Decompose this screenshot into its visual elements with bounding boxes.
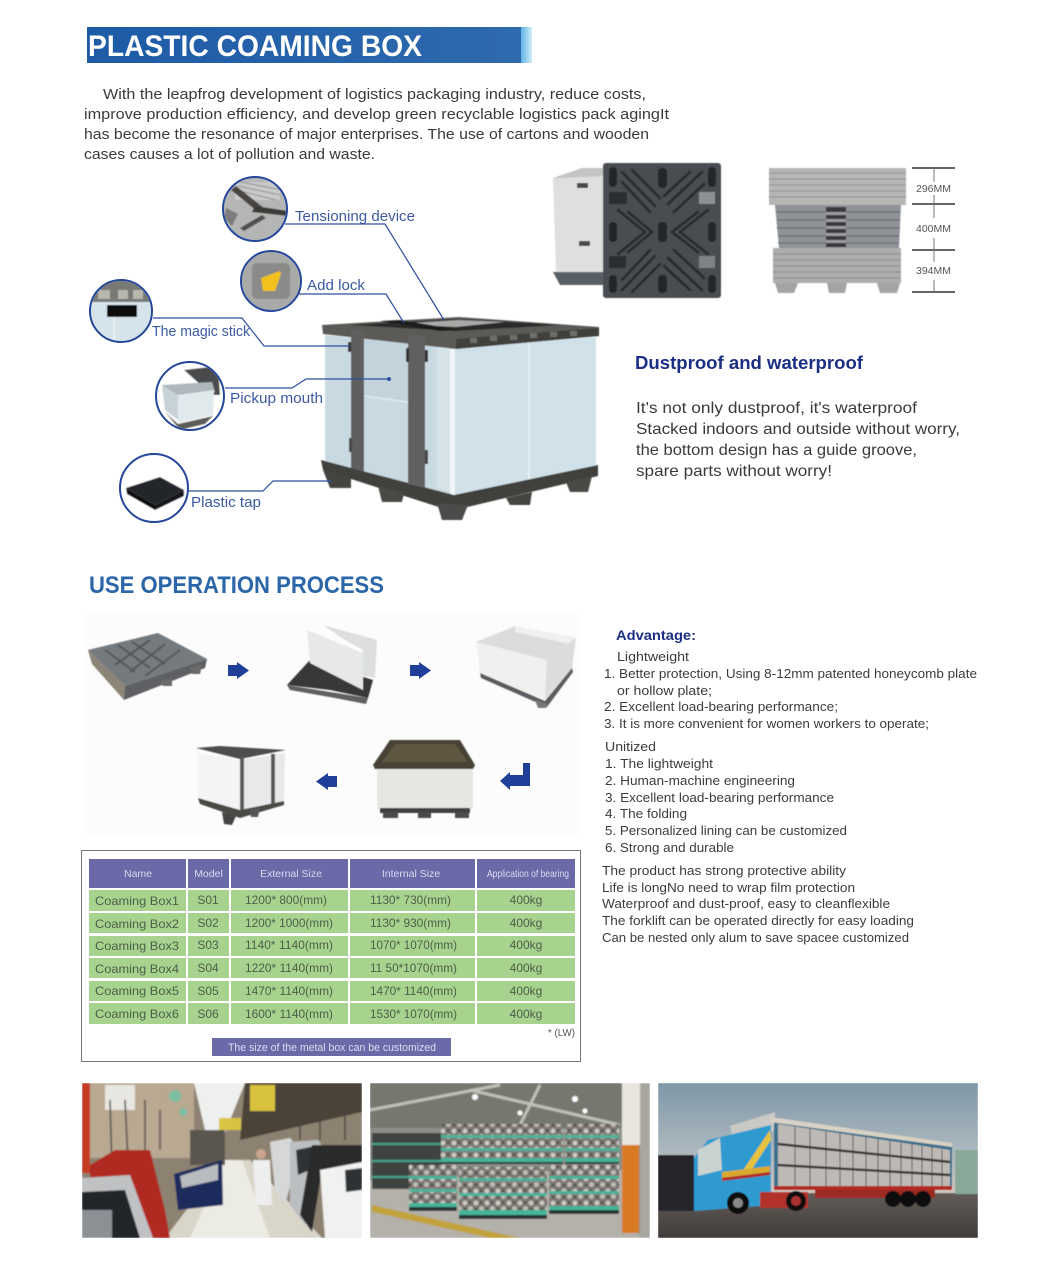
row: coaming box 5: 1470* 1140(mm) — [370, 984, 457, 998]
row: coaming box 3: 400kg — [510, 938, 542, 952]
advantages text: 1. Better protection, Using 8-12mm patented honeycomb plate — [604, 666, 977, 681]
photo: folded stack with dimensions — [769, 168, 955, 293]
text block: dustproof description: the bottom design has a guide groove, — [636, 442, 917, 459]
intro paragraph: has become the resonance of major enterprises. The use of cartons and wooden — [84, 126, 649, 143]
intro paragraph — [84, 86, 670, 163]
specification table — [82, 850, 580, 1062]
icon: tensioning device detail — [222, 176, 288, 242]
dimension: 400MM: 400MM — [916, 223, 951, 235]
title: PLASTIC COAMING BOX — [88, 30, 422, 63]
text block: dustproof description: Stacked indoors and outside without worry, — [636, 421, 960, 438]
label: add lock: Add lock — [307, 277, 365, 294]
advantages text: The product has strong protective ability — [602, 863, 847, 878]
row: coaming box 2: S02 — [197, 916, 219, 930]
advantages text: 3. It is more convenient for women workers to operate; — [604, 716, 929, 731]
process diagram panel — [85, 613, 580, 835]
arrow left — [316, 773, 337, 790]
row: coaming box 2 — [89, 913, 575, 933]
dimension: 394MM: 394MM — [916, 265, 951, 277]
row: coaming box 4: Coaming Box4 — [95, 962, 179, 976]
advantages text: Waterproof and dust-proof, easy to cleanflexible — [602, 896, 890, 911]
arrow left-turn — [500, 763, 530, 790]
text block: dustproof description: spare parts without worry! — [636, 463, 832, 480]
icon: magic stick detail — [90, 280, 152, 342]
customization note bar: The size of the metal box can be customized — [228, 1042, 436, 1054]
row: coaming box 3: 1140* 1140(mm) — [245, 938, 333, 952]
callout line: add lock — [299, 294, 404, 323]
icon: add lock detail — [241, 251, 301, 311]
advantages text — [602, 627, 977, 945]
advantages text: 3. Excellent load-bearing performance — [605, 790, 834, 805]
row: coaming box 5: 400kg — [510, 984, 542, 998]
photo: warehouse with stacked pallets — [370, 1083, 650, 1238]
text block: dustproof description: It's not only dustproof, it's waterproof — [636, 400, 918, 417]
row: coaming box 6: 400kg — [510, 1007, 542, 1021]
row: coaming box 1: 1200* 800(mm) — [245, 893, 327, 907]
advantages text: 5. Personalized lining can be customized — [605, 823, 847, 838]
table header: Name — [124, 868, 152, 880]
dimension: 296MM: 296MM — [916, 183, 951, 195]
icon: plastic tap pallet detail — [120, 454, 188, 522]
advantages text: The forklift can be operated directly for easy loading — [602, 913, 914, 928]
row: coaming box 5: Coaming Box5 — [95, 984, 179, 998]
step 1: pallet — [88, 633, 207, 700]
row: coaming box 4: 400kg — [510, 961, 542, 975]
table header — [89, 859, 575, 888]
photo: blue truck with trailer — [658, 1083, 978, 1238]
callout line: tensioning device — [285, 224, 444, 320]
row: coaming box 6: 1530* 1070(mm) — [370, 1007, 457, 1021]
advantages text: 2. Excellent load-bearing performance; — [604, 699, 838, 714]
advantages text: 6. Strong and durable — [605, 840, 734, 855]
row: coaming box 2: Coaming Box2 — [95, 917, 179, 931]
row: coaming box 1 — [89, 890, 575, 911]
text block: dustproof description — [636, 400, 960, 480]
label: pickup mouth: Pickup mouth — [230, 390, 323, 407]
step 2: base with panels — [287, 625, 377, 704]
table header: Model — [194, 868, 223, 880]
label: the magic stick: The magic stick — [152, 323, 250, 340]
advantages text: Unitized — [605, 739, 656, 754]
row: coaming box 2: 400kg — [510, 916, 542, 930]
row: coaming box 4: S04 — [197, 961, 219, 975]
row: coaming box 1: 1130* 730(mm) — [370, 893, 451, 907]
row: coaming box 1: 400kg — [510, 893, 542, 907]
advantages text: 4. The folding — [605, 806, 687, 821]
unit note: * (LW) — [548, 1028, 575, 1039]
heading: advantage: Advantage: — [616, 627, 696, 643]
photo: box with pallet underside — [553, 163, 721, 298]
callout line: pickup mouth — [225, 377, 391, 388]
arrow right 2 — [410, 662, 431, 679]
row: coaming box 5 — [89, 981, 575, 1001]
icon: pickup mouth detail — [156, 362, 224, 430]
row: coaming box 3: 1070* 1070(mm) — [370, 938, 457, 952]
row: coaming box 3: Coaming Box3 — [95, 939, 179, 953]
row: coaming box 2: 1200* 1000(mm) — [245, 916, 333, 930]
row: coaming box 2: 1130* 930(mm) — [370, 916, 451, 930]
photo: car assembly line — [82, 1083, 362, 1238]
row: coaming box 3: S03 — [197, 938, 219, 952]
row: coaming box 5: S05 — [197, 984, 219, 998]
row: coaming box 6: S06 — [197, 1007, 219, 1021]
advantages text: 1. The lightweight — [605, 756, 713, 771]
callout line: plastic tap — [189, 481, 332, 491]
row: coaming box 6: Coaming Box6 — [95, 1007, 179, 1021]
row: coaming box 6 — [89, 1003, 575, 1024]
arrow right 1 — [228, 662, 249, 679]
row: coaming box 4: 1220* 1140(mm) — [245, 961, 333, 975]
row: coaming box 4 — [89, 958, 575, 978]
row: coaming box 3 — [89, 936, 575, 956]
row: coaming box 1: Coaming Box1 — [95, 894, 179, 908]
intro paragraph: cases causes a lot of pollution and waste. — [84, 146, 375, 163]
label: tensioning device: Tensioning device — [295, 208, 415, 225]
heading: dustproof and waterproof: Dustproof and waterproof — [635, 353, 864, 373]
heading: use operation process: USE OPERATION PROCESS — [89, 572, 384, 599]
step 3: open box — [476, 626, 576, 708]
advantages text: Can be nested only alum to save spacee customized — [602, 930, 909, 945]
step 5: strapped box — [196, 746, 286, 825]
advantages text: or hollow plate; — [617, 683, 712, 698]
advantages text: Life is longNo need to wrap film protection — [602, 880, 855, 895]
intro paragraph: With the leapfrog development of logistics packaging industry, reduce costs, — [103, 86, 646, 103]
step 4: closed box with lid — [373, 740, 475, 818]
customization note bar — [212, 1038, 451, 1056]
advantages text: 2. Human-machine engineering — [605, 773, 795, 788]
row: coaming box 5: 1470* 1140(mm) — [245, 984, 333, 998]
table header: Internal Size — [382, 868, 440, 880]
row: coaming box 1: S01 — [197, 893, 219, 907]
product diagram: main coaming box with callouts — [90, 176, 599, 522]
row: coaming box 6: 1600* 1140(mm) — [245, 1007, 333, 1021]
advantages text: Lightweight — [617, 649, 689, 664]
table header: External Size — [260, 868, 322, 880]
intro paragraph: improve production efficiency, and develop green recyclable logistics pack agingIt — [84, 106, 670, 123]
main box illustration — [321, 317, 599, 520]
row: coaming box 4: 11 50*1070(mm) — [370, 961, 457, 975]
label: plastic tap: Plastic tap — [191, 494, 261, 511]
title banner — [87, 27, 532, 63]
table header: Application of bearing — [487, 868, 569, 880]
callout line: magic stick — [153, 318, 350, 346]
